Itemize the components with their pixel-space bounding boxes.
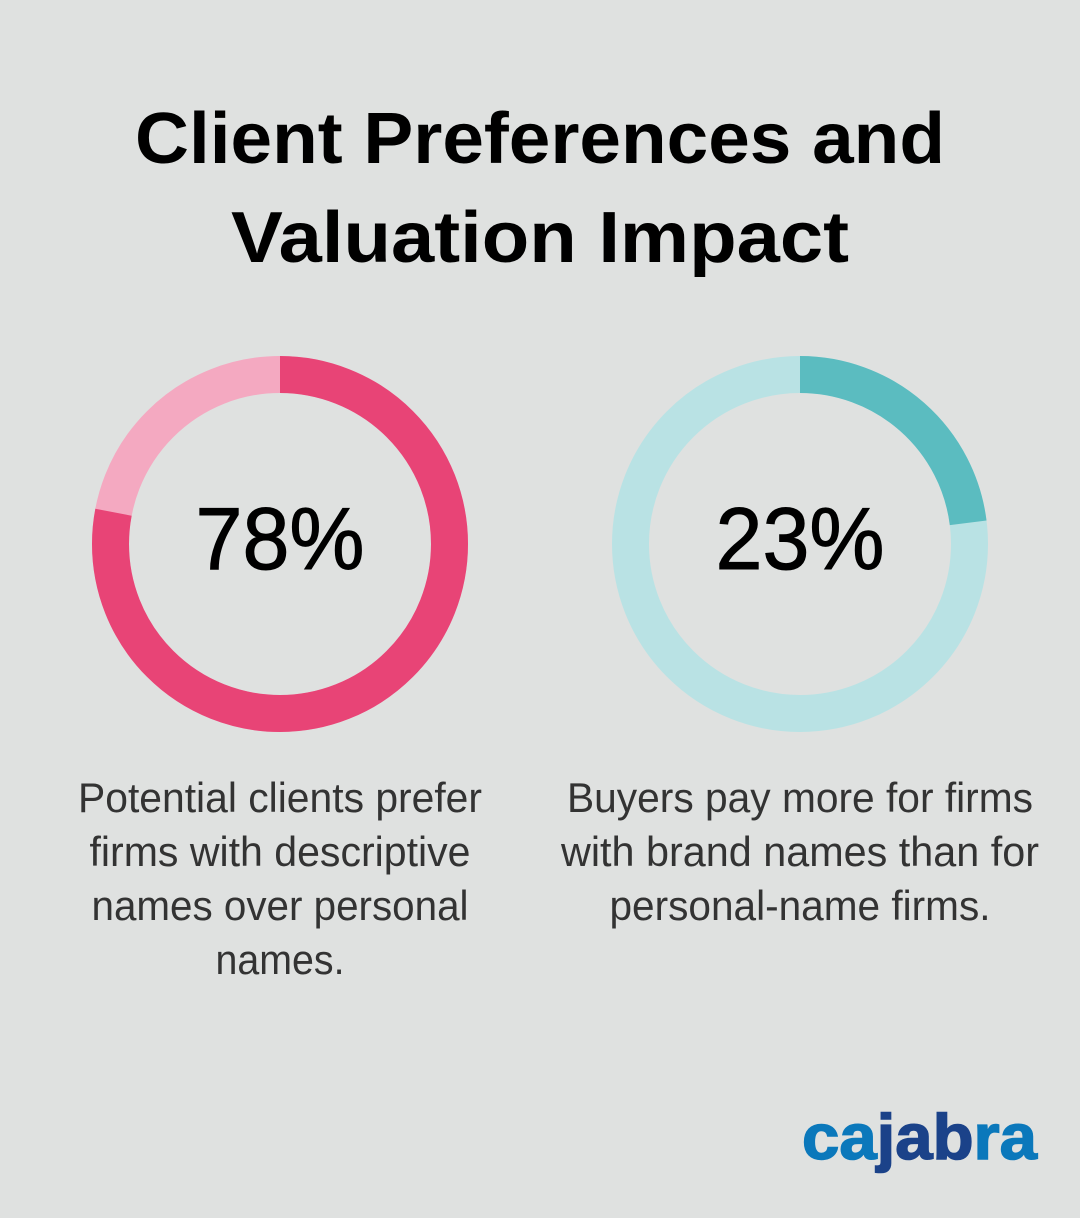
description: 78%: Potential clients prefer	[78, 774, 482, 821]
description: 23%: Buyers pay more for firms	[567, 774, 1033, 821]
panel: 78% descriptive names	[78, 374, 482, 983]
description: 23%	[560, 774, 1039, 929]
title: Client Preferences and	[135, 99, 945, 179]
stat: 23%: 23%	[716, 489, 884, 588]
title: Valuation Impact	[231, 198, 849, 278]
logo: cajabra: cajabra	[802, 1101, 1037, 1173]
description: 23%: personal-name firms.	[610, 882, 990, 929]
description: 78%: firms with descriptive	[90, 828, 470, 875]
description: 78%: names over personal	[92, 882, 468, 929]
donut chart: 23%	[630, 374, 970, 714]
description: 78%: names.	[216, 936, 344, 983]
description: 78%	[78, 774, 482, 983]
title	[135, 99, 945, 278]
donut chart: 78%	[110, 374, 450, 714]
stat: 78%: 78%	[196, 489, 364, 588]
description: 23%: with brand names than for	[560, 828, 1039, 875]
panel: 23% brand names	[560, 374, 1039, 929]
